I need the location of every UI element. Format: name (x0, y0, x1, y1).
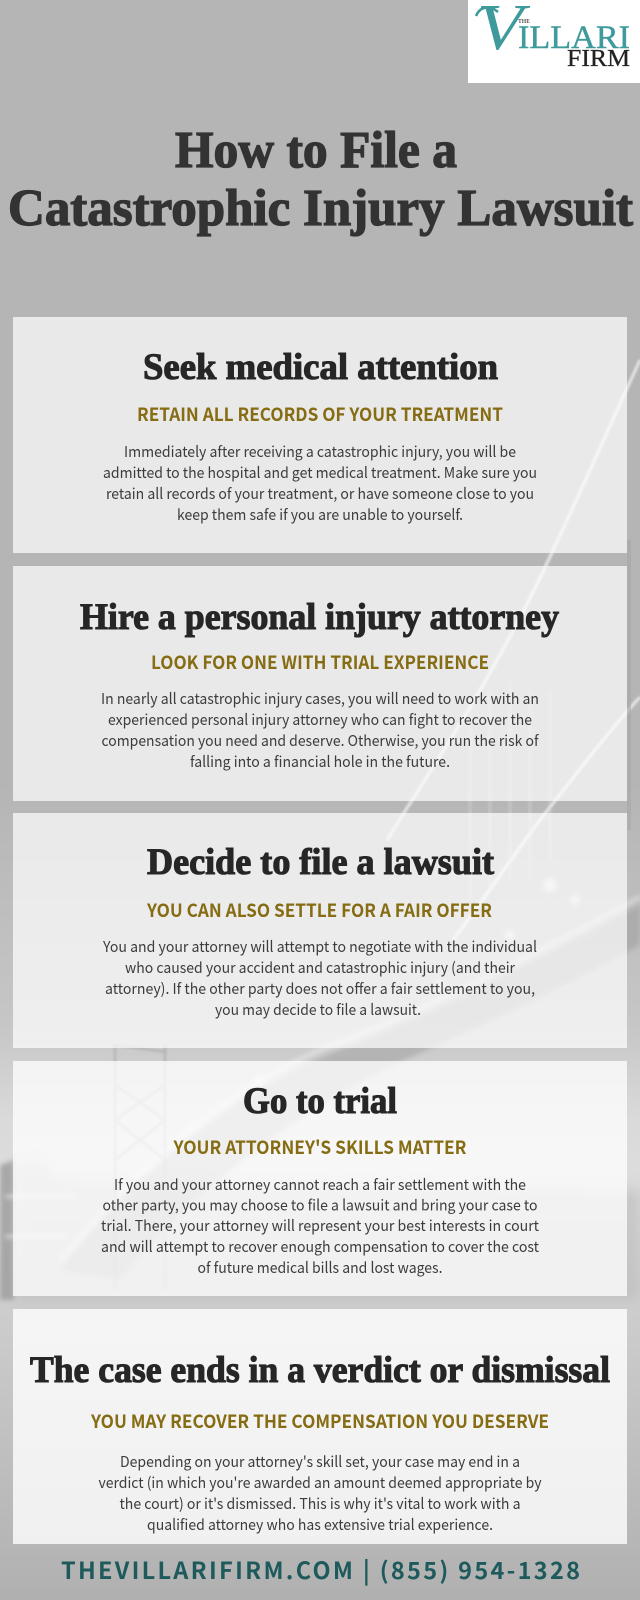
body text (103, 441, 537, 525)
heading: Seek medical attention (143, 347, 498, 388)
body text: retain all records of your treatment, or have someone close to you (106, 483, 534, 504)
logo: THE: THE (518, 19, 530, 25)
subheading: YOU CAN ALSO SETTLE FOR A FAIR OFFER (146, 897, 492, 923)
body text: falling into a financial hole in the future. (190, 751, 450, 772)
subheading: YOU MAY RECOVER THE COMPENSATION YOU DESERVE (90, 1408, 549, 1434)
body text: compensation you need and deserve. Otherwise, you run the risk of (102, 730, 540, 751)
panel: go to trial (13, 1061, 627, 1296)
body text: trial. There, your attorney will represent your best interests in court (101, 1215, 539, 1236)
body text: the court) or it's dismissed. This is why it's vital to work with a (120, 1493, 520, 1514)
body text: admitted to the hospital and get medical treatment. Make sure you (103, 462, 537, 483)
panel: seek medical attention (13, 317, 627, 553)
logo (468, 0, 640, 83)
heading: The case ends in a verdict or dismissal (30, 1350, 610, 1391)
logo: ILLARI: ILLARI (518, 20, 630, 56)
panel: hire a personal injury attorney (13, 566, 627, 801)
body text: other party, you may choose to file a lawsuit and bring your case to (102, 1194, 538, 1216)
body text: you may decide to file a lawsuit. (215, 999, 421, 1020)
panel: decide to file a lawsuit (13, 813, 627, 1048)
body text (101, 1174, 539, 1278)
body text: of future medical bills and lost wages. (198, 1257, 442, 1278)
heading: Go to trial (243, 1081, 397, 1122)
footer contact line: THEVILLARIFIRM.COM | (855) 954-1328 (61, 1552, 580, 1586)
body text: and will attempt to recover enough compensation to cover the cost (101, 1236, 539, 1257)
body text: verdict (in which you're awarded an amount deemed appropriate by (98, 1472, 542, 1493)
title (8, 122, 634, 237)
body text: Immediately after receiving a catastrophic injury, you will be (124, 441, 516, 462)
subheading: YOUR ATTORNEY'S SKILLS MATTER (173, 1134, 467, 1160)
body text: experienced personal injury attorney who can fight to recover the (108, 709, 532, 730)
body text (102, 936, 537, 1020)
body text (98, 1451, 542, 1535)
body text: You and your attorney will attempt to negotiate with the individual (102, 936, 537, 957)
subheading: LOOK FOR ONE WITH TRIAL EXPERIENCE (151, 649, 489, 675)
body text: qualified attorney who has extensive trial experience. (147, 1514, 493, 1535)
body text: Depending on your attorney's skill set, your case may end in a (120, 1451, 520, 1472)
body text: If you and your attorney cannot reach a fair settlement with the (114, 1174, 526, 1195)
panel: the case ends in a verdict or dismissal (13, 1309, 627, 1544)
body text: attorney). If the other party does not offer a fair settlement to you, (105, 978, 535, 999)
body text (101, 688, 540, 772)
body text: who caused your accident and catastrophic injury (and their (125, 957, 515, 978)
title: How to File a (175, 122, 457, 179)
body text: keep them safe if you are unable to yourself. (177, 504, 463, 525)
body text: In nearly all catastrophic injury cases, you will need to work with an (101, 688, 539, 709)
heading: Hire a personal injury attorney (80, 597, 559, 638)
heading: Decide to file a lawsuit (147, 842, 495, 883)
logo: FIRM: FIRM (567, 46, 630, 72)
title: Catastrophic Injury Lawsuit (8, 180, 634, 237)
subheading: RETAIN ALL RECORDS OF YOUR TREATMENT (137, 401, 503, 427)
